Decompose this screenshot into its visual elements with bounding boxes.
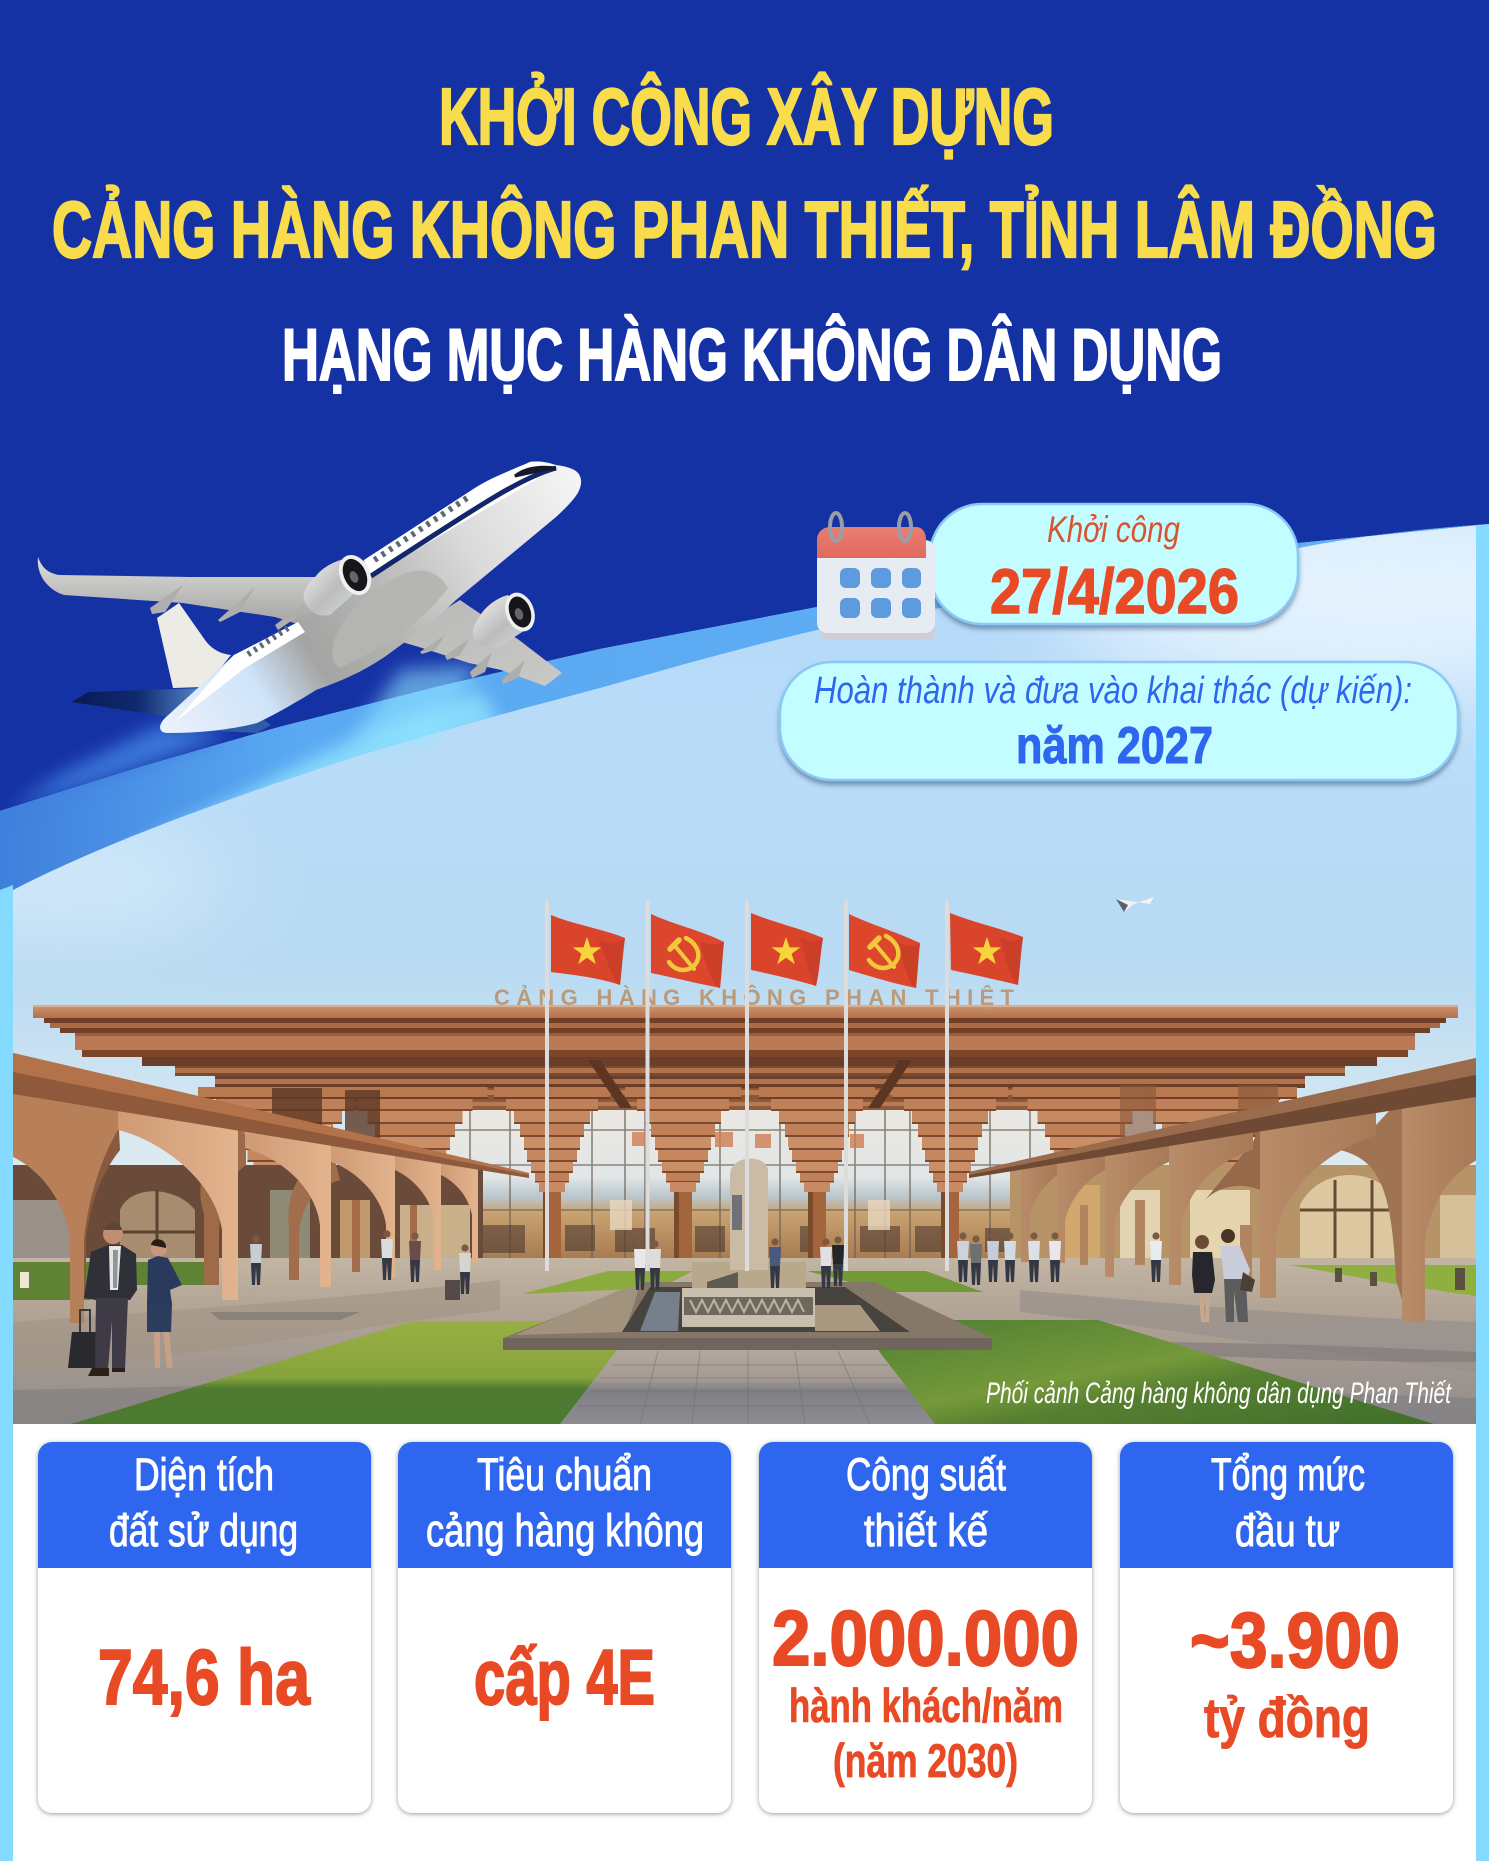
date: 27/4/2026 [990, 557, 1239, 627]
card: land area [38, 1442, 371, 1813]
start date pill [930, 504, 1298, 627]
engine exhaust glow [10, 665, 480, 810]
value [1190, 1596, 1400, 1749]
background people [250, 1230, 1162, 1300]
monument fountain [503, 1159, 992, 1350]
card heading [109, 1449, 298, 1556]
airplane illustration [10, 461, 581, 810]
side accent bars [0, 524, 1489, 1861]
card heading: Diện tích [134, 1449, 274, 1500]
calendar icon [817, 513, 935, 640]
vertical tail [157, 603, 231, 688]
value [772, 1594, 1079, 1787]
right engine [473, 588, 540, 648]
white bottom panel [13, 1424, 1476, 1861]
lawn panels [71, 1271, 1434, 1424]
tail stabilizers [72, 688, 271, 733]
value: ~3.900 [1190, 1596, 1400, 1684]
card: design capacity [759, 1442, 1092, 1813]
right wing [395, 600, 562, 686]
header dark blue panel with swoosh edge [0, 0, 1489, 811]
foreground couple left [68, 1222, 182, 1376]
completion date pill [780, 662, 1458, 780]
paved walkway [560, 1350, 935, 1424]
card heading: cảng hàng không [426, 1505, 704, 1556]
foreground couple right [1192, 1229, 1255, 1322]
value: hành khách/năm [789, 1679, 1063, 1732]
flags [551, 913, 1023, 988]
card heading [1211, 1449, 1365, 1556]
bushes and lawn behind colonnades [13, 1262, 1476, 1300]
building sign: CẢNG HÀNG KHÔNG PHAN THIỆT [494, 985, 1015, 1010]
left colonnade [13, 1053, 529, 1323]
right colonnade [969, 1058, 1477, 1322]
left wing [38, 557, 397, 630]
card heading [846, 1449, 1006, 1556]
light blue background and sky [0, 480, 1489, 1430]
card heading: Tiêu chuẩn [477, 1449, 652, 1500]
light blue swoosh band [0, 500, 1489, 900]
flag poles [545, 900, 949, 1271]
card heading: đầu tư [1235, 1505, 1340, 1556]
title [52, 72, 1437, 396]
plaza ground [13, 1258, 1476, 1428]
card heading: Tổng mức [1211, 1449, 1365, 1500]
card: total investment [1120, 1442, 1453, 1813]
card heading [426, 1449, 704, 1556]
airport terminal photo [13, 897, 1477, 1428]
value: cấp 4E [474, 1633, 655, 1721]
title line 1: KHỞI CÔNG XÂY DỰNG [439, 72, 1054, 161]
card heading: thiết kế [864, 1505, 988, 1556]
building glass facade [446, 1110, 1054, 1258]
card: airport standard [398, 1442, 731, 1813]
value: 74,6 ha [98, 1633, 310, 1721]
left engine [304, 550, 377, 616]
value: tỷ đồng [1204, 1686, 1370, 1749]
side wings behind colonnades [13, 1165, 1476, 1265]
label: start: Khởi công [1047, 509, 1180, 550]
stele pillar [692, 1159, 806, 1290]
roof stepped layers [33, 1005, 1458, 1110]
year: năm 2027 [1016, 717, 1213, 775]
stepped concrete consoles [198, 1060, 1297, 1258]
value: 2.000.000 [772, 1594, 1079, 1682]
fuselage [160, 461, 581, 733]
card heading: Công suất [846, 1449, 1006, 1500]
flap fairings [150, 585, 525, 684]
small distant airplane [1116, 897, 1154, 912]
card heading: đất sử dụng [109, 1505, 298, 1556]
value: (năm 2030) [833, 1734, 1018, 1787]
